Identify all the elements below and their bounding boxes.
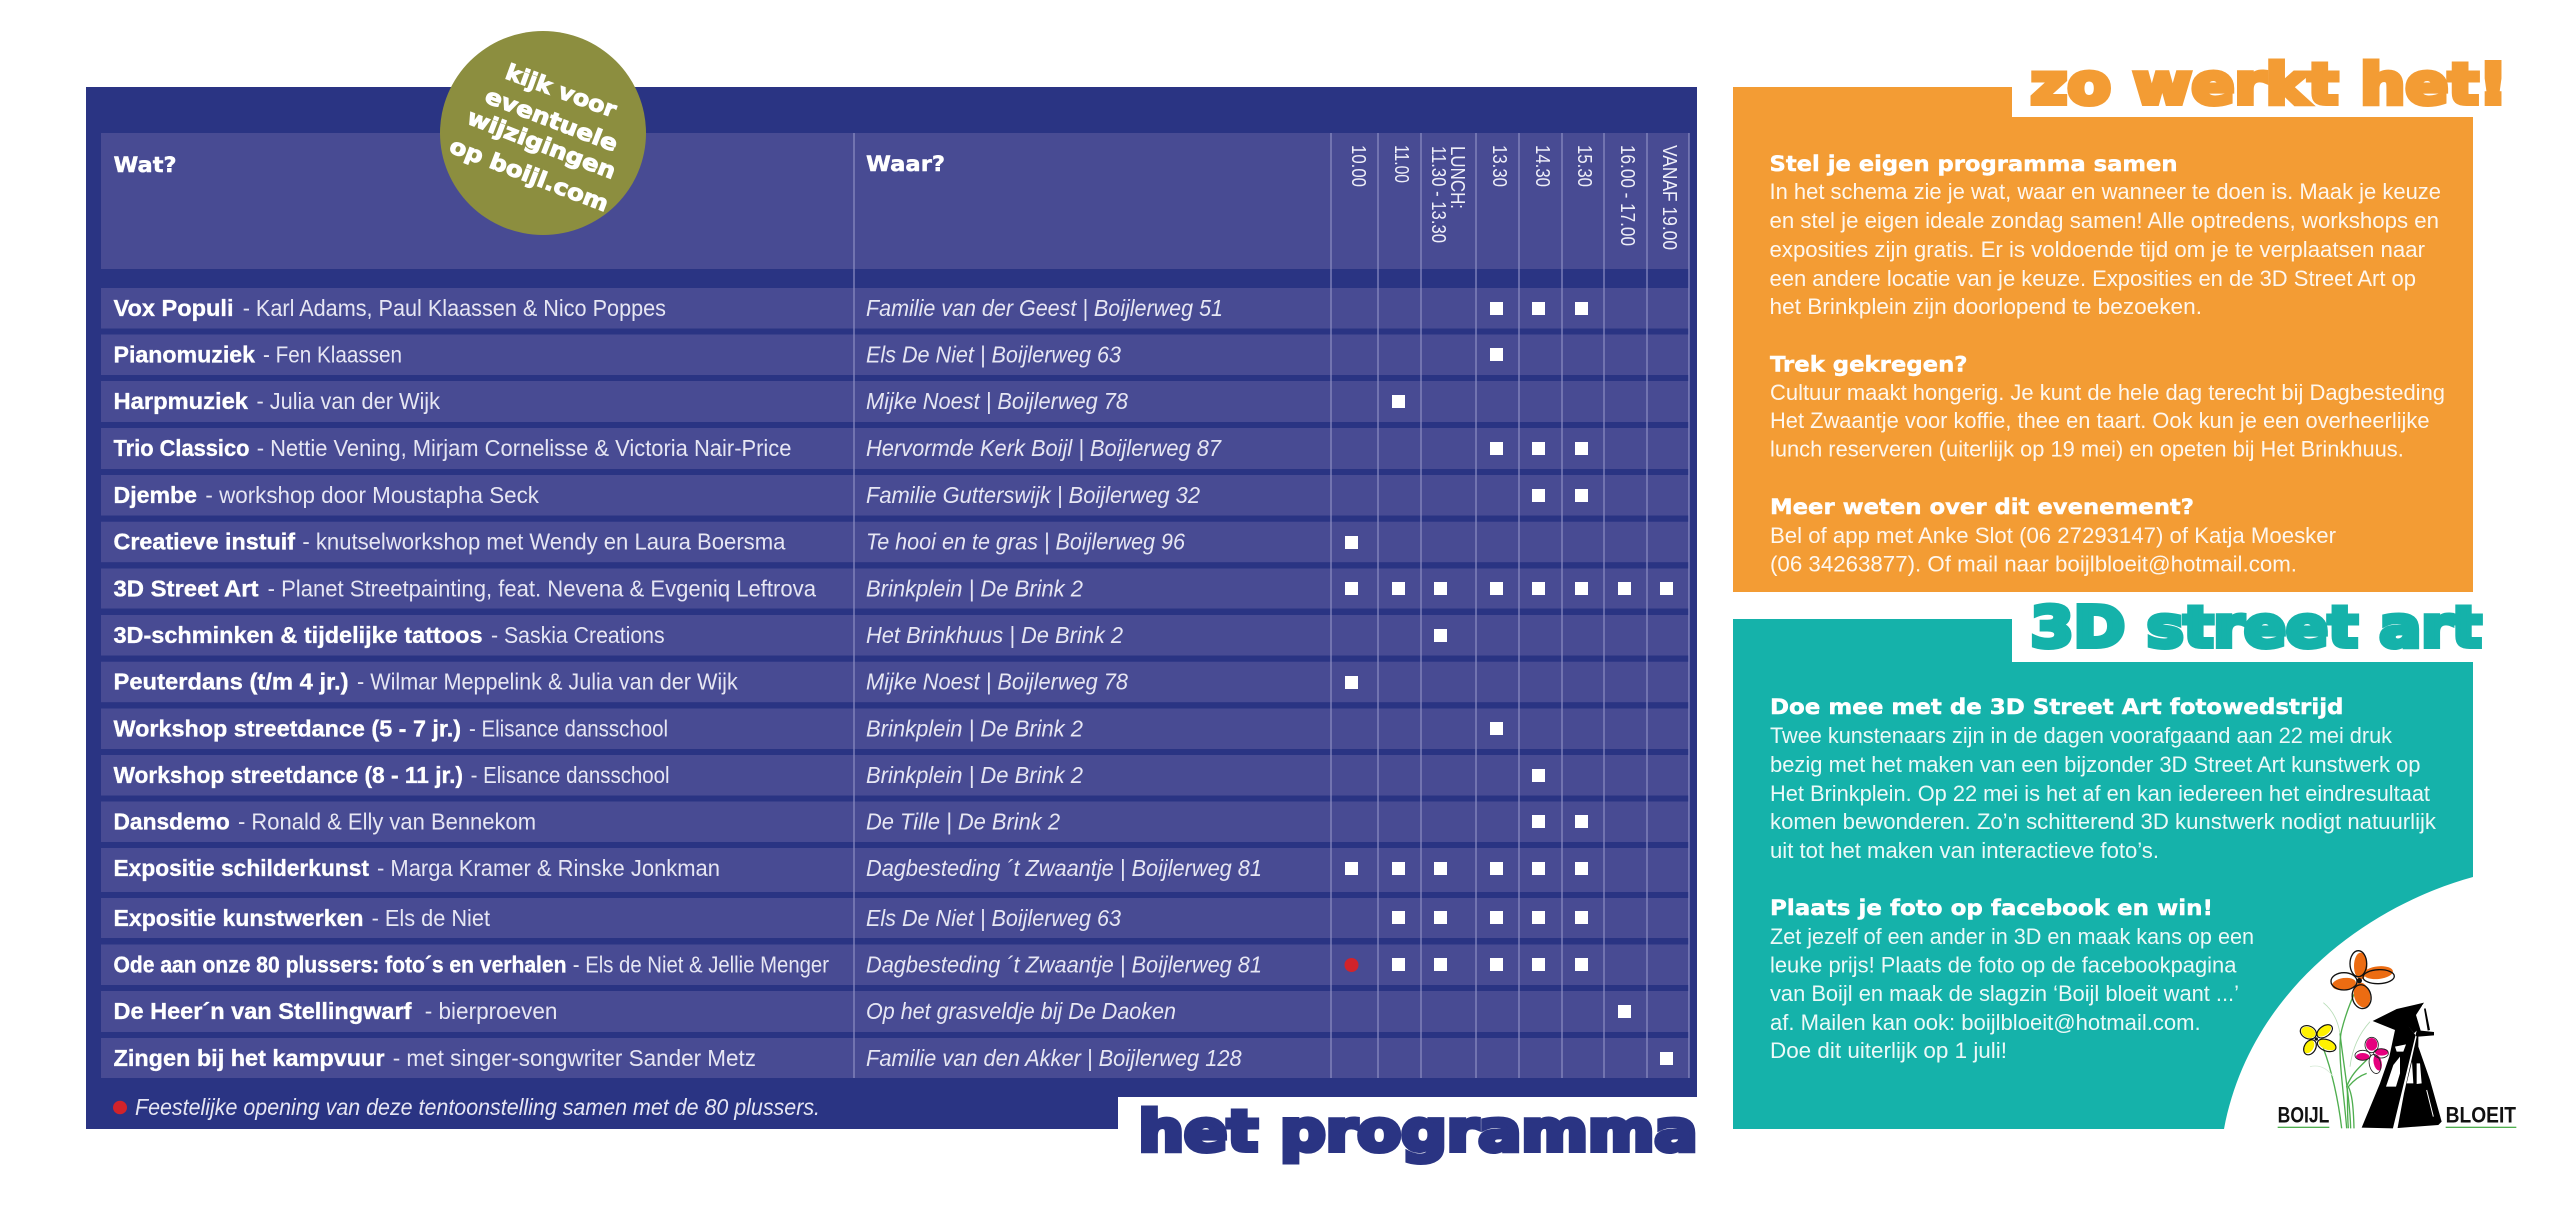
text block: stel je eigen programma samen: het Brinkplein zijn doorlopend te bezoeken. xyxy=(1770,294,2202,319)
row: Ode aan onze 80 plussers: Dagbesteding ´t Zwaantje | Boijlerweg 81 xyxy=(866,952,1262,978)
header: time slots: 10.00 xyxy=(1347,145,1369,187)
row: Djembe xyxy=(101,475,1689,516)
header: time slots: VANAF 19.00 xyxy=(1658,145,1680,250)
row: Trio Classico xyxy=(101,428,1689,469)
row: 3D-schminken: 3D-schminken & tijdelijke tattoos xyxy=(114,622,482,648)
row: Expositie schilderkunst: - Marga Kramer & Rinske Jonkman xyxy=(377,855,720,881)
text block: fotowedstrijd: Twee kunstenaars zijn in de dagen voorafgaand aan 22 mei druk xyxy=(1770,723,2393,748)
text block: stel je eigen programma samen: Stel je eigen programma samen xyxy=(1770,152,2178,176)
footnote: opening: Feestelijke opening van deze tentoonstelling samen met de 80 plussers. xyxy=(135,1094,820,1120)
row: Trio Classico: Hervormde Kerk Boijl | Boijlerweg 87 xyxy=(866,435,1222,461)
text block: fotowedstrijd: komen bewonderen. Zo’n schitterend 3D kunstwerk nodigt natuurlijk xyxy=(1770,809,2437,834)
text block: meer weten: Bel of app met Anke Slot (06 27293147) of Katja Moesker xyxy=(1770,523,2336,548)
row: Peuterdans: - Wilmar Meppelink & Julia van der Wijk xyxy=(357,669,738,695)
row: Pianomuziek: Els De Niet | Boijlerweg 63 xyxy=(866,342,1121,368)
row: Pianomuziek: Pianomuziek xyxy=(114,342,256,368)
callout: check for changes xyxy=(440,31,646,235)
row: Djembe: Familie Gutterswijk | Boijlerweg 32 xyxy=(866,482,1200,508)
row: Expositie kunstwerken xyxy=(101,898,1689,938)
row: Workshop streetdance 8-11: Brinkplein | De Brink 2 xyxy=(866,762,1083,788)
logo flower: pink xyxy=(2355,1037,2388,1075)
panel: programme schedule background xyxy=(86,87,1697,1129)
text block: fotowedstrijd: bezig met het maken van een bijzonder 3D Street Art kunstwerk op xyxy=(1770,752,2420,777)
text block: plaats je foto: Zet jezelf of een ander in 3D en maak kans op een xyxy=(1770,924,2254,949)
heading: het programma: het programma xyxy=(1138,1100,1698,1164)
header: time slots: LUNCH: xyxy=(1446,146,1468,209)
row: De Heer'n van Stellingwarf xyxy=(101,991,1689,1032)
row: Expositie schilderkunst: Dagbesteding ´t Zwaantje | Boijlerweg 81 xyxy=(866,855,1262,881)
row: De Heer'n van Stellingwarf: De Heer´n van Stellingwarf xyxy=(114,998,412,1024)
row: Harpmuziek: Harpmuziek xyxy=(114,388,249,414)
row: Djembe: - workshop door Moustapha Seck xyxy=(205,482,539,508)
row: Zingen bij het kampvuur: Familie van den Akker | Boijlerweg 128 xyxy=(866,1045,1242,1071)
logo flower: yellow xyxy=(2298,1022,2338,1057)
callout: check for changes: kijk voor xyxy=(502,60,620,123)
row: 3D Street Art: 3D Street Art xyxy=(114,576,259,602)
row: Vox Populi xyxy=(101,288,1689,328)
header: time slots: 16.00 - 17.00 xyxy=(1616,145,1638,246)
text block: plaats je foto: van Boijl en maak de slagzin ‘Boijl bloeit want ...’ xyxy=(1770,981,2239,1006)
row: Harpmuziek xyxy=(101,381,1689,422)
row: Creatieve instuif xyxy=(101,522,1689,562)
header: time slots: 13.30 xyxy=(1488,145,1510,187)
row: Zingen bij het kampvuur: - met singer-songwriter Sander Metz xyxy=(393,1045,756,1071)
text block: fotowedstrijd: Het Brinkplein. Op 22 mei is het af en kan iedereen het eindresultaat xyxy=(1770,781,2431,806)
text block: stel je eigen programma samen: en stel je eigen ideale zondag samen! Alle optredens, workshops en xyxy=(1770,208,2439,233)
row: Dansdemo: - Ronald & Elly van Bennekom xyxy=(238,808,536,834)
logo wordmark left: BOIJL xyxy=(2278,1102,2329,1127)
header: Waar: Waar? xyxy=(866,152,945,176)
row: Workshop streetdance 5-7: - Elisance dansschool xyxy=(469,716,668,742)
row: Peuterdans xyxy=(101,662,1689,702)
row: 3D-schminken: Het Brinkhuus | De Brink 2 xyxy=(866,622,1123,648)
text block: trek gekregen: lunch reserveren (uiterlijk op 19 mei) en opeten bij Het Brinkhuus. xyxy=(1770,437,2404,462)
text block: fotowedstrijd: Doe mee met de 3D Street Art fotowedstrijd xyxy=(1770,695,2344,719)
heading: 3D street art: 3D street art xyxy=(2030,596,2482,660)
logo windmill silhouette xyxy=(2362,1003,2442,1129)
text block: meer weten xyxy=(1770,495,2336,577)
header: time slots: 11.00 xyxy=(1390,145,1412,183)
row: Trio Classico: Trio Classico xyxy=(114,435,250,461)
logo stems xyxy=(2310,988,2370,1128)
text block: stel je eigen programma samen xyxy=(1770,152,2441,319)
row: Djembe: Djembe xyxy=(114,482,197,508)
row: Vox Populi: Familie van der Geest | Boijlerweg 51 xyxy=(866,295,1223,321)
text block: fotowedstrijd xyxy=(1770,695,2437,863)
row: Expositie kunstwerken: Els De Niet | Boijlerweg 63 xyxy=(866,905,1121,931)
table header row xyxy=(101,133,1689,269)
row: Workshop streetdance 5-7: Workshop streetdance (5 - 7 jr.) xyxy=(114,716,461,742)
row: Dansdemo xyxy=(101,802,1689,842)
row: Vox Populi: - Karl Adams, Paul Klaassen & Nico Poppes xyxy=(243,295,666,321)
header: time slots: 14.30 xyxy=(1531,145,1553,187)
text block: stel je eigen programma samen: exposities zijn gratis. Er is voldoende tijd om je te verplaatsen naar xyxy=(1770,237,2425,262)
row: Ode aan onze 80 plussers: - Els de Niet & Jellie Menger xyxy=(573,952,829,978)
row: Dansdemo: Dansdemo xyxy=(114,808,230,834)
row: Harpmuziek: Mijke Noest | Boijlerweg 78 xyxy=(866,388,1128,414)
row: Peuterdans: Peuterdans (t/m 4 jr.) xyxy=(114,669,348,695)
row: Expositie schilderkunst: Expositie schilderkunst xyxy=(114,855,369,881)
header: time slots: 11.30 - 13.30 xyxy=(1427,146,1449,243)
callout: check for changes: op boijl.com xyxy=(446,134,612,218)
callout: check for changes: wijzigingen xyxy=(463,105,619,185)
row: Workshop streetdance 5-7 xyxy=(101,708,1689,749)
row: 3D-schminken xyxy=(101,615,1689,656)
header: time slots xyxy=(1347,145,1680,250)
row: Ode aan onze 80 plussers: Ode aan onze 80 plussers: foto´s en verhalen xyxy=(114,952,566,978)
row: Pianomuziek: - Fen Klaassen xyxy=(263,342,402,368)
row: Vox Populi: Vox Populi xyxy=(114,295,234,321)
row: Zingen bij het kampvuur: Zingen bij het kampvuur xyxy=(114,1045,384,1071)
row: 3D Street Art: Brinkplein | De Brink 2 xyxy=(866,576,1083,602)
text block: plaats je foto: Doe dit uiterlijk op 1 juli! xyxy=(1770,1038,2007,1063)
text block: trek gekregen xyxy=(1770,352,2445,462)
row: De Heer'n van Stellingwarf: Op het grasveldje bij De Daoken xyxy=(866,998,1176,1024)
logo flower: orange xyxy=(2331,951,2395,1010)
row: Workshop streetdance 8-11: Workshop streetdance (8 - 11 jr.) xyxy=(114,762,463,788)
row: Expositie schilderkunst xyxy=(101,848,1689,892)
row: De Heer'n van Stellingwarf: - bierproeven xyxy=(425,998,557,1024)
header: Wat: Wat? xyxy=(114,153,176,177)
row: Creatieve instuif: Te hooi en te gras | Boijlerweg 96 xyxy=(866,529,1185,555)
row: 3D Street Art xyxy=(101,568,1689,608)
text block: plaats je foto: Plaats je foto op facebook en win! xyxy=(1770,896,2213,920)
text block: meer weten: Meer weten over dit evenement? xyxy=(1770,495,2194,519)
row: Trio Classico: - Nettie Vening, Mirjam Cornelisse & Victoria Nair-Price xyxy=(257,435,792,461)
text block: fotowedstrijd: uit tot het maken van interactieve foto’s. xyxy=(1770,838,2159,863)
text block: meer weten: (06 34263877). Of mail naar boijlbloeit@hotmail.com. xyxy=(1770,552,2297,577)
row: Zingen bij het kampvuur xyxy=(101,1038,1689,1078)
row: Peuterdans: Mijke Noest | Boijlerweg 78 xyxy=(866,669,1128,695)
text block: trek gekregen: Trek gekregen? xyxy=(1770,352,1968,376)
panel: zo werkt het xyxy=(1733,52,2508,592)
row: Creatieve instuif: - knutselworkshop met Wendy en Laura Boersma xyxy=(302,529,786,555)
header: time slots: 15.30 xyxy=(1573,145,1595,187)
panel: 3D street art xyxy=(1733,596,2482,1129)
row: Expositie kunstwerken: - Els de Niet xyxy=(372,905,491,931)
row: 3D Street Art: - Planet Streetpainting, feat. Nevena & Evgeniq Leftrova xyxy=(268,576,816,602)
row: 3D-schminken: - Saskia Creations xyxy=(491,622,665,648)
text block: plaats je foto: af. Mailen kan ook: boijlbloeit@hotmail.com. xyxy=(1770,1010,2201,1035)
text block: stel je eigen programma samen: In het schema zie je wat, waar en wanneer te doen is. Maak je keuze xyxy=(1770,179,2441,204)
row: Harpmuziek: - Julia van der Wijk xyxy=(256,388,440,414)
text block: stel je eigen programma samen: een andere locatie van je keuze. Exposities en de 3D Street Art op xyxy=(1770,266,2416,291)
text block: trek gekregen: Cultuur maakt hongerig. Je kunt de hele dag terecht bij Dagbesteding xyxy=(1770,380,2445,405)
text block: plaats je foto: leuke prijs! Plaats de foto op de facebookpagina xyxy=(1770,952,2237,977)
row: Workshop streetdance 8-11 xyxy=(101,755,1689,796)
row: Pianomuziek xyxy=(101,334,1689,375)
row: Creatieve instuif: Creatieve instuif xyxy=(114,529,295,555)
logo: Boijl Bloeit xyxy=(2278,951,2516,1129)
row: Dansdemo: De Tille | De Brink 2 xyxy=(866,808,1060,834)
row: Ode aan onze 80 plussers xyxy=(101,944,1689,985)
row: Workshop streetdance 8-11: - Elisance dansschool xyxy=(471,762,670,788)
heading: zo werkt het: zo werkt het! xyxy=(2030,52,2508,118)
text block: trek gekregen: Het Zwaantje voor koffie, thee en taart. Ook kun je een overheerlijke xyxy=(1770,408,2430,433)
callout: check for changes: eventuele xyxy=(481,84,621,157)
row: Expositie kunstwerken: Expositie kunstwerken xyxy=(114,905,364,931)
row: Workshop streetdance 5-7: Brinkplein | De Brink 2 xyxy=(866,716,1083,742)
logo wordmark right: BLOEIT xyxy=(2446,1102,2516,1127)
text block: plaats je foto xyxy=(1770,896,2254,1063)
